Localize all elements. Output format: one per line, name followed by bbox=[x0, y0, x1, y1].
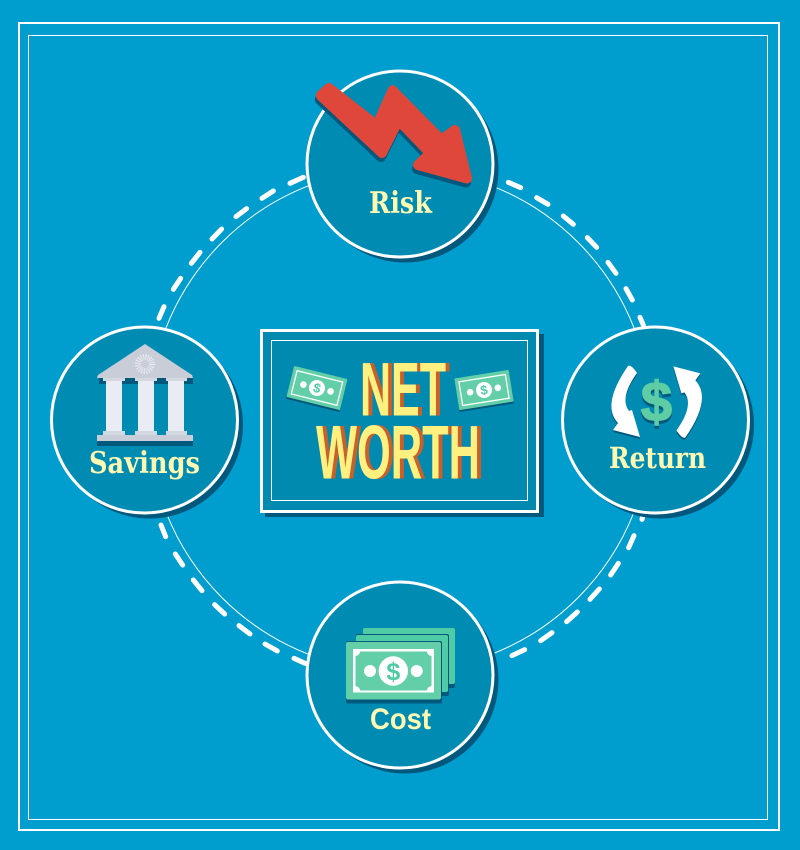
heading: NET WORTH: WORTH bbox=[316, 410, 480, 496]
label: Return: Return bbox=[609, 441, 706, 475]
icon: left bill bbox=[286, 366, 348, 412]
right arrow bbox=[673, 366, 702, 438]
dashed connecting arcs bbox=[159, 177, 643, 663]
icon: red down arrow bbox=[320, 88, 467, 182]
heading: NET WORTH bbox=[316, 348, 484, 496]
center panel: Net Worth bbox=[262, 330, 544, 517]
arrow shadows bbox=[611, 368, 702, 440]
dollar sign: $ bbox=[641, 373, 672, 436]
icon: left bill: $ bbox=[312, 380, 323, 396]
node: Return bbox=[562, 327, 754, 518]
label: Savings: Savings bbox=[89, 446, 200, 481]
thin connecting ring bbox=[148, 168, 652, 672]
node: Risk bbox=[307, 71, 498, 262]
icon: circular arrows with dollar: $ bbox=[641, 370, 672, 433]
icon: stack of bills: $ bbox=[386, 658, 400, 686]
icon: right bill: $ bbox=[479, 382, 490, 398]
left arrow bbox=[611, 366, 640, 437]
heading: NET WORTH: NET bbox=[360, 348, 446, 432]
node: Savings bbox=[52, 327, 243, 518]
label: Cost: Cost bbox=[370, 703, 431, 736]
node: Cost bbox=[307, 582, 498, 774]
icon: circular arrows with dollar bbox=[611, 366, 702, 440]
icon: bank building bbox=[97, 344, 193, 446]
heading: NET WORTH: WORTH bbox=[320, 410, 484, 496]
icon: stack of bills bbox=[346, 628, 455, 704]
heading: NET WORTH: NET bbox=[364, 348, 450, 432]
icon: right bill bbox=[454, 370, 514, 412]
label: Risk: Risk bbox=[369, 186, 433, 221]
